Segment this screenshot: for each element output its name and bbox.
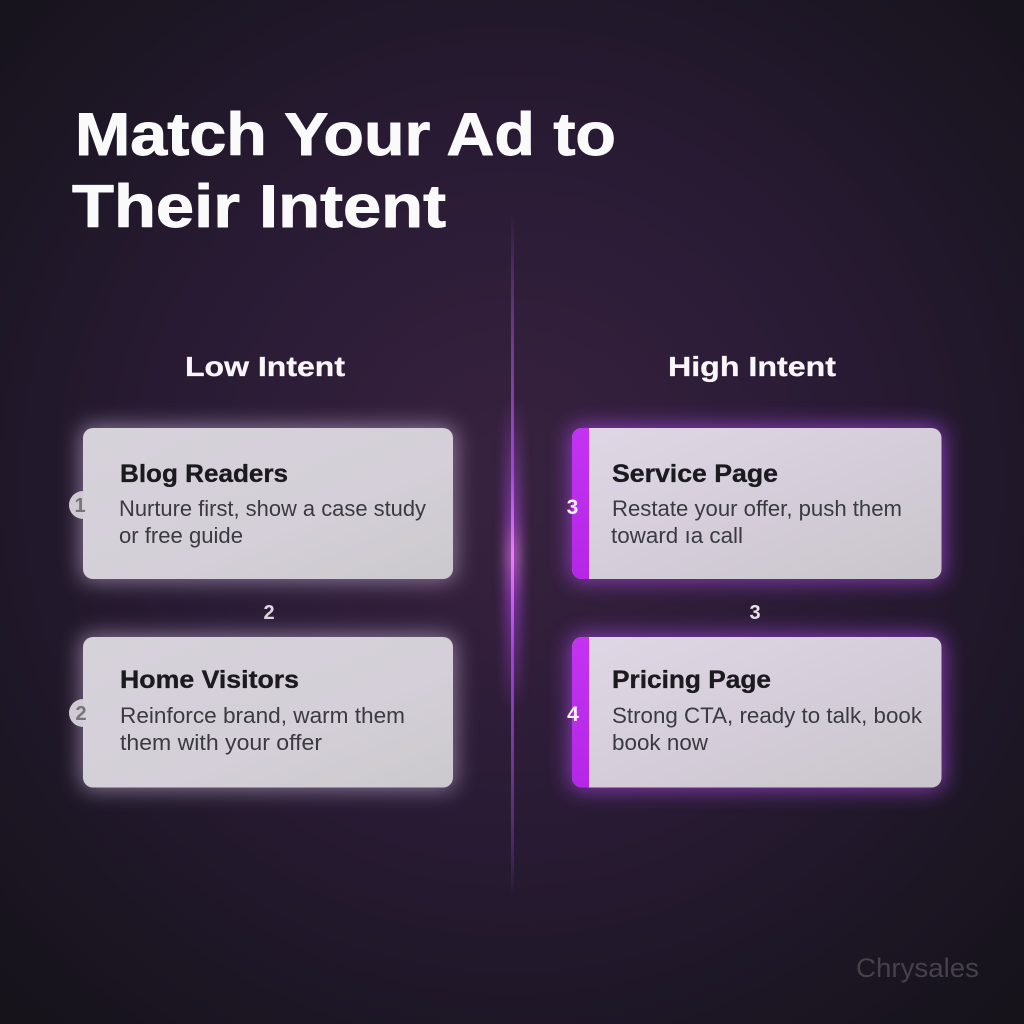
card: pricing page: book now [612, 730, 709, 755]
card: blog readers [69, 426, 455, 581]
card: pricing page [567, 635, 944, 790]
card: pricing page: Pricing Page [612, 666, 771, 694]
badge 2 [69, 699, 97, 727]
badge number 1: 1 [74, 495, 86, 517]
card: service page [567, 426, 944, 581]
connector number: left: 2 [263, 602, 275, 624]
card: home visitors: them with your offer [120, 730, 323, 755]
card: service page: Service Page [612, 460, 778, 488]
column heading: low intent: Low Intent [185, 351, 345, 382]
card: blog readers: Nurture first, show a case study [119, 496, 427, 521]
column heading: high intent: High Intent [668, 351, 836, 382]
card: service page: Restate your offer, push them [612, 496, 902, 521]
card: blog readers: Blog Readers [120, 460, 288, 488]
card: pricing page: Strong CTA, ready to talk, book [612, 703, 923, 728]
card: blog readers: or free guide [119, 523, 243, 548]
number 4: 4 [567, 703, 579, 726]
number 3: 3 [567, 496, 578, 519]
connector number: right: 3 [749, 602, 761, 624]
center divider line [506, 215, 520, 895]
title: Their Intent [72, 173, 446, 240]
card: home visitors: Home Visitors [120, 666, 299, 694]
card: service page: toward ıa call [611, 523, 743, 548]
title: Match Your Ad to [75, 101, 616, 168]
card: home visitors: Reinforce brand, warm them [120, 703, 405, 728]
title [72, 101, 616, 240]
brand wordmark: Chrysales [856, 953, 979, 983]
accent bar [572, 428, 589, 579]
badge number 2: 2 [75, 703, 87, 725]
accent bar [572, 637, 589, 788]
card: home visitors [69, 635, 455, 790]
badge 1 [69, 491, 97, 519]
